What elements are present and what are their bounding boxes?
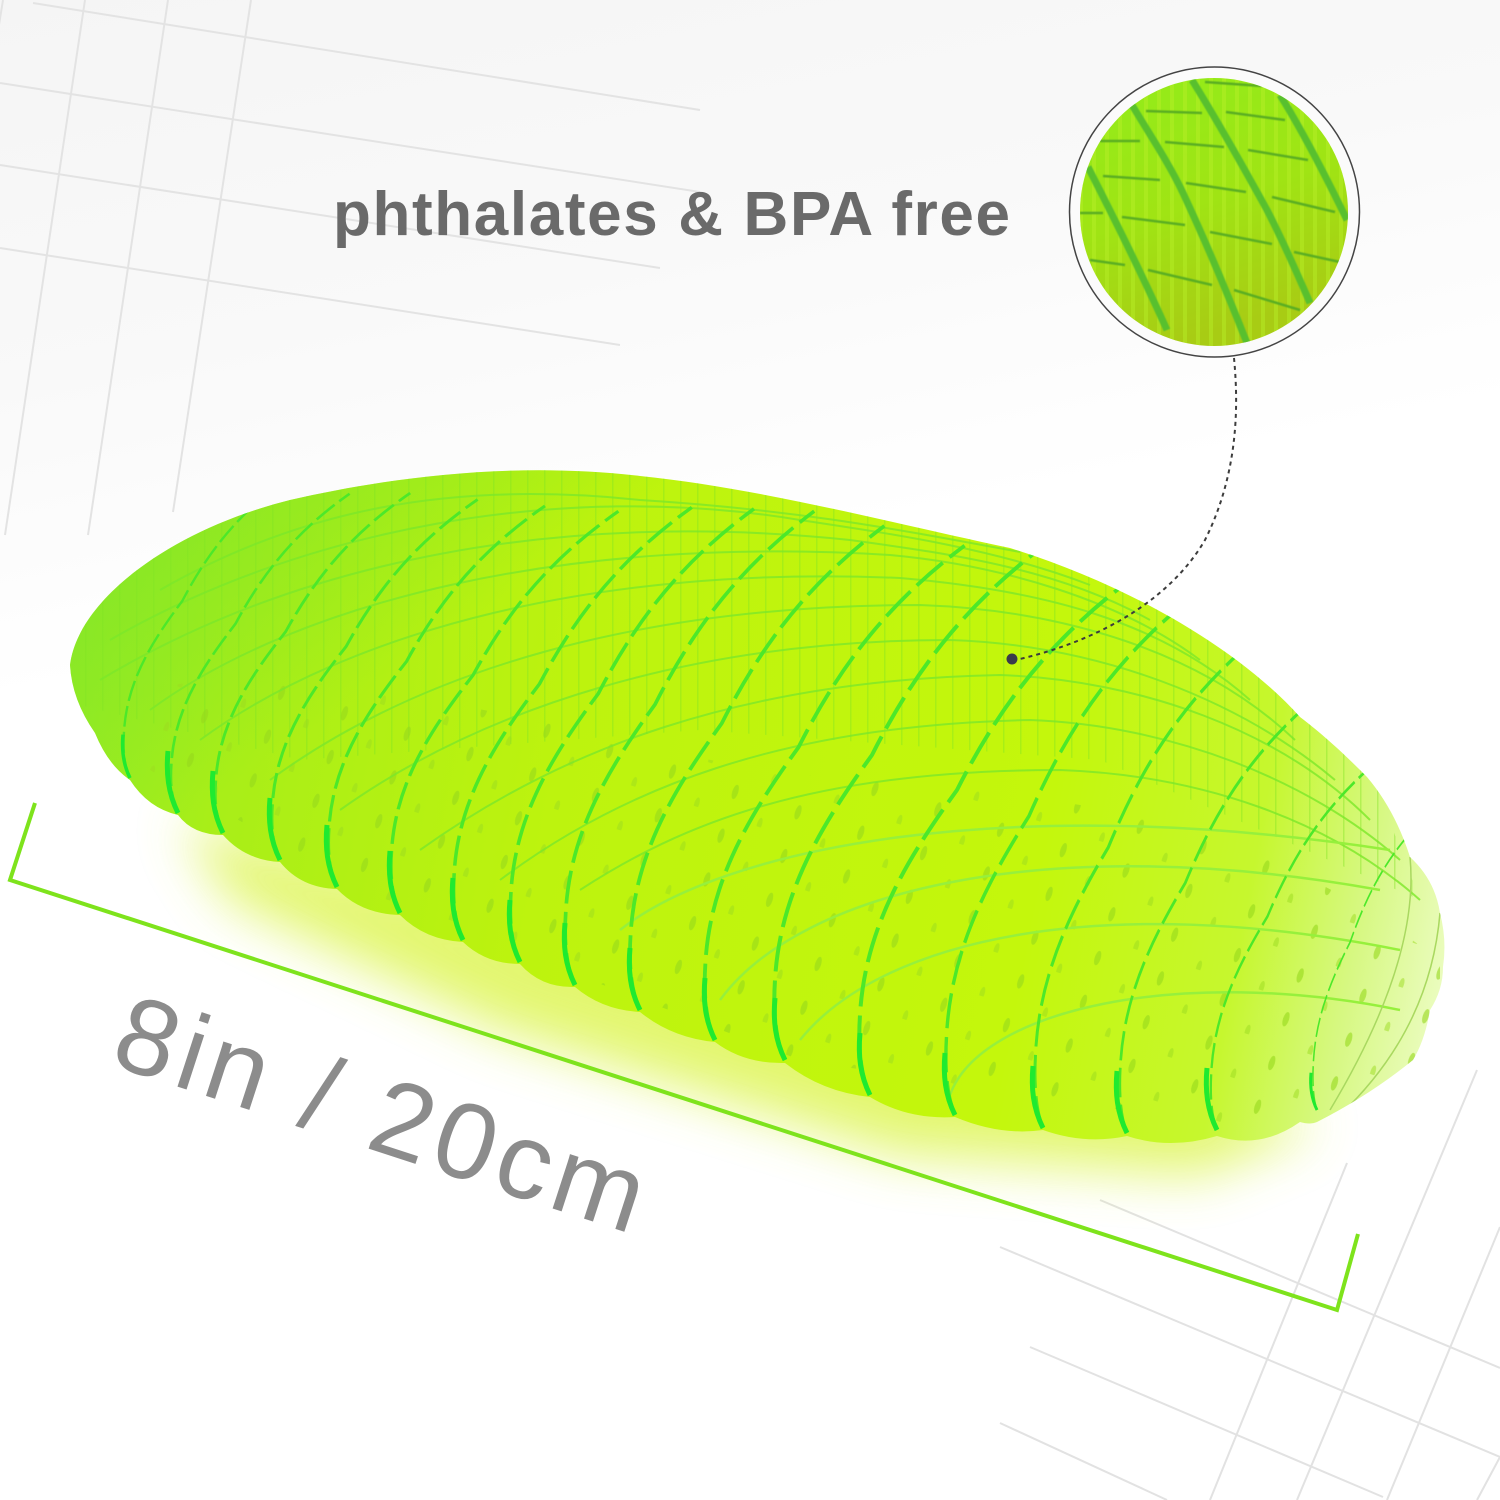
inset magnifier circle [1070, 67, 1360, 357]
toy body [70, 470, 1444, 1143]
cross lines [100, 494, 1420, 900]
pale translucent shells at right end [1330, 857, 1440, 1115]
dotted leader line [1020, 358, 1236, 659]
diagonal ribs, dashed upper part [124, 479, 1416, 1133]
bright solid lower edges of ribs [123, 735, 1317, 1133]
product shadow glow [180, 820, 1320, 1175]
product: green ribbed squishy toy [70, 470, 1444, 1143]
dimension label: 8in / 20cm: 8in / 20cm [101, 971, 661, 1256]
lower oval rings [620, 826, 1400, 1095]
heading: phthalates & BPA free: phthalates & BPA free [333, 180, 1010, 249]
background grid: top left [0, 0, 700, 535]
leader dot [1006, 654, 1018, 664]
background grid: bottom right [1000, 1070, 1500, 1500]
toy surface detail [70, 470, 1440, 1134]
dimension bracket [10, 803, 1358, 1310]
